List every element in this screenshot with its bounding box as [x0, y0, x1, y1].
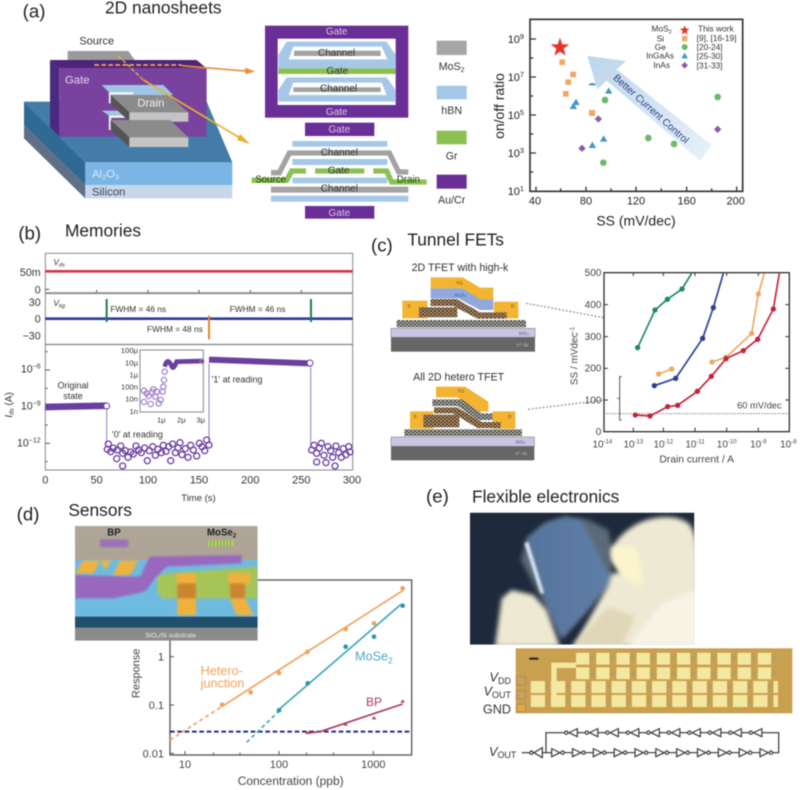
diagram: All 2D hetero TFET: All 2D hetero TFET	[413, 372, 505, 384]
chart: drain current vs time: '0' at reading	[112, 429, 163, 439]
y tick labels: 10	[508, 186, 520, 198]
diagram: 2D TFET with high-k: TG	[456, 281, 463, 287]
chart: SS vs drain current: -13	[635, 439, 644, 445]
y tick labels	[508, 32, 524, 198]
chart: drain current vs time: Original	[58, 381, 88, 391]
heading: Tunnel FETs: Tunnel FETs	[407, 229, 504, 249]
chart: response vs concentration: 1	[158, 652, 164, 664]
chart: SS vs drain current: 100	[585, 395, 602, 406]
inset chart: fast switching: 10n	[125, 395, 138, 404]
panel: (a) 2D nanosheets device	[23, 0, 467, 219]
y tick labels: 10	[508, 110, 520, 122]
legend: materials: 2	[461, 67, 465, 74]
diagram: 2D TFET with high-k: SiO₂	[519, 331, 529, 337]
inset chart: fast switching	[121, 346, 205, 425]
diagram: planar cross-section: Channel	[321, 147, 358, 158]
chart: drain current vs time: −9	[33, 400, 41, 407]
inset chart: fast switching: 1μ	[129, 370, 138, 379]
legend: MoS	[652, 24, 669, 34]
x axis labels: 50	[91, 474, 103, 486]
chart: SS vs drain current	[569, 268, 797, 466]
diagram: All 2D hetero TFET	[391, 372, 534, 460]
diagram: 2D TFET with high-k: D	[511, 304, 515, 310]
legend: materials	[437, 41, 467, 206]
chart: drain current vs time: '1' at reading	[212, 375, 263, 385]
inset chart: fast switching: 10μ	[125, 358, 138, 367]
chart: SS vs drain current: 400	[585, 300, 602, 311]
arrow: better current control: Better Current Control	[611, 73, 691, 146]
chart: SS vs drain current: 10	[592, 439, 604, 450]
icon: 3D transistor stack: Silicon	[92, 186, 125, 198]
panel: (e) Flexible electronics	[426, 486, 792, 760]
photo: BP/MoSe2 heterojunction device: MoSe	[207, 527, 233, 538]
diagram: planar cross-section: Gate	[328, 165, 350, 176]
chart: response vs concentration: 0.01	[143, 748, 164, 760]
leader lines	[526, 303, 645, 409]
y tick labels: 10	[508, 148, 520, 160]
chart: drain current vs time: I	[4, 415, 15, 418]
x axis labels: 300	[343, 474, 361, 486]
y tick labels: 10	[508, 72, 520, 84]
chart: Vds: 50m	[20, 267, 41, 279]
diagram: 2D TFET with high-k: 2D TFET with high-k	[412, 262, 509, 274]
diagram: double gate cross-section	[265, 26, 408, 118]
legend: Si	[657, 34, 664, 44]
legend: [25-30]	[697, 51, 723, 61]
diagram: planar cross-section: Channel	[321, 184, 358, 195]
x tick labels: 200	[727, 195, 745, 207]
labels: VDD VOUT GND: OUT	[492, 690, 512, 700]
chart: response vs concentration: 100	[270, 759, 288, 771]
arrow: to bottom cross-section	[118, 56, 250, 144]
chart: drain current vs time	[4, 345, 353, 470]
legend: materials: Au/Cr	[438, 194, 466, 206]
legend: [31-33]	[697, 60, 723, 70]
chart: SS vs drain current: -14	[604, 439, 613, 445]
panel: (c) Tunnel FETs	[371, 229, 797, 466]
diagram: 2D TFET with high-k: n⁺-Si	[517, 343, 528, 349]
chart: Vbg: bg	[59, 304, 66, 310]
diagram: double gate cross-section: Channel	[318, 48, 355, 59]
diagram: All 2D hetero TFET: n⁺-Si	[515, 451, 527, 457]
labels: VDD VOUT GND: V	[490, 670, 500, 684]
x axis title: Time: Time (s)	[181, 493, 216, 504]
chart: SS vs drain current: -8	[791, 439, 797, 445]
x tick labels: 80	[580, 195, 592, 207]
chart: Vbg: FWHM = 46 ns	[110, 304, 166, 314]
circuit: ring oscillator: OUT	[497, 750, 517, 760]
arrow: better current control	[587, 56, 712, 161]
chart: SS vs drain current: 10	[750, 439, 761, 450]
chart: drain current vs time: −12	[29, 438, 41, 445]
chart: drain current vs time: ds	[9, 408, 16, 415]
chart: response vs concentration: 1000	[361, 759, 386, 771]
chart: Vbg: 0	[35, 314, 41, 326]
chart: drain current vs time: 10	[17, 438, 29, 450]
photo: BP/MoSe2 heterojunction device: 2	[233, 532, 237, 539]
icon: 3D transistor stack: Source	[79, 36, 114, 48]
chart: response vs concentration: 0.1	[149, 700, 164, 712]
chart: SS vs drain current: 10	[623, 439, 635, 450]
icon: 3D transistor stack	[24, 36, 232, 198]
icon: 3D transistor stack: O	[106, 168, 115, 180]
y tick labels: 9	[520, 32, 524, 41]
chart: SS vs drain current: Drain current / A	[659, 455, 734, 466]
icon: 3D transistor stack: 3	[115, 173, 119, 182]
chart: SS vs drain current: 0	[596, 427, 602, 438]
icon: 3D transistor stack: Al	[92, 168, 102, 180]
chart: Vbg: FWHM = 48 ns	[147, 324, 203, 334]
legend: materials: Gr	[446, 150, 458, 162]
diagram: double gate cross-section: Gate	[326, 107, 348, 118]
x axis labels: 250	[292, 474, 310, 486]
chart: response vs concentration: Hetero-	[201, 664, 243, 678]
photo: BP/MoSe2 heterojunction device	[75, 526, 258, 641]
legend: InAs	[653, 60, 670, 70]
chart: drain current vs time: 10	[21, 400, 33, 412]
chart: SS vs drain current: 10	[653, 439, 665, 450]
chart: Vbg: V	[53, 298, 59, 308]
inset chart: fast switching: 1n	[129, 407, 138, 416]
legend: 2	[669, 29, 672, 35]
chart: SS vs drain current: 300	[585, 332, 602, 343]
chart: SS vs drain current: -1	[569, 326, 576, 332]
photo: BP/MoSe2 heterojunction device: BP	[107, 527, 121, 538]
icon: 3D transistor stack: Drain	[137, 98, 164, 110]
panel label d: (d)	[17, 504, 39, 525]
chart: Vds	[20, 253, 353, 296]
axes	[530, 19, 743, 191]
diagram: double gate cross-section: Gate	[327, 66, 349, 77]
panel: (b) Memories	[4, 221, 361, 486]
legend: Ge	[655, 42, 666, 52]
inset chart: fast switching: 1μ	[157, 416, 166, 425]
x tick labels: 40	[529, 195, 541, 207]
chart: response vs concentration: Response	[130, 649, 142, 698]
panel label e: (e)	[426, 486, 449, 507]
inset chart: fast switching: 2μ	[177, 416, 186, 425]
legend: [9], [16-19]	[697, 33, 736, 43]
chart: SS vs drain current: -9	[761, 439, 767, 445]
x axis labels: 200	[241, 474, 259, 486]
y tick labels: 5	[520, 108, 524, 117]
legend: [20-24]	[697, 42, 723, 52]
chart: drain current vs time: (A)	[4, 392, 15, 408]
chart: on/off ratio vs SS	[491, 19, 745, 229]
x axis labels: 0	[42, 474, 48, 486]
chart: SS vs drain current: -11	[696, 439, 705, 445]
icon: 3D transistor stack: 2	[102, 173, 106, 182]
chart: Vds: V	[53, 257, 59, 267]
diagram: 2D TFET with high-k: Al₂O₃	[454, 293, 466, 299]
chart: response vs concentration	[130, 580, 412, 788]
diagram: 2D TFET with high-k	[391, 262, 535, 352]
photo: ring oscillator chip	[516, 648, 792, 713]
x axis title: SS (mV/dec)	[596, 213, 676, 229]
inset chart: fast switching: 3μ	[196, 416, 205, 425]
x tick labels	[529, 195, 745, 207]
labels: VDD VOUT GND: DD	[498, 676, 512, 686]
chart: SS vs drain current: 10	[780, 439, 791, 450]
chart: SS vs drain current: SS / mVdec	[569, 332, 580, 385]
chart: SS vs drain current: 60 mV/dec	[737, 401, 782, 411]
y axis title: on/off ratio	[491, 73, 507, 139]
chart: drain current vs time: −6	[33, 364, 41, 371]
chart: Vbg	[23, 294, 353, 344]
diagram: All 2D hetero TFET: S	[413, 414, 417, 420]
x tick labels: 160	[678, 195, 696, 207]
labels: VDD VOUT GND: GND	[483, 702, 511, 716]
x tick labels: 120	[627, 195, 645, 207]
y tick labels: 7	[520, 70, 524, 79]
chart: SS vs drain current: 500	[585, 268, 602, 279]
heading: Memories: Memories	[65, 221, 141, 241]
chart: response vs concentration: 2	[388, 655, 393, 665]
diagram: planar cross-section: Drain	[397, 175, 420, 186]
diagram: double gate cross-section: Gate	[326, 26, 348, 37]
chart: SS vs drain current: 200	[585, 364, 602, 375]
y tick labels: 1	[520, 184, 524, 193]
inset chart: fast switching: 100n	[121, 382, 138, 391]
circuit: ring oscillator: V	[489, 745, 499, 759]
labels: VDD VOUT GND	[483, 670, 512, 716]
labels: VDD VOUT GND: V	[484, 684, 494, 698]
inset chart: fast switching: 100μ	[121, 346, 138, 355]
chart: Vds: ds	[59, 263, 65, 269]
diagram: planar cross-section: Gate	[329, 208, 351, 219]
circuit: ring oscillator	[489, 727, 779, 760]
diagram: All 2D hetero TFET: TG	[457, 389, 464, 395]
y tick labels: 10	[508, 34, 520, 46]
panel: (d) Sensors	[17, 500, 412, 788]
chart: drain current vs time: state	[63, 391, 83, 401]
x axis labels: 100	[139, 474, 157, 486]
x axis labels: 150	[190, 474, 208, 486]
chart: response vs concentration: Concentration (ppb)	[238, 774, 344, 788]
y tick labels: 3	[520, 146, 524, 155]
diagram: planar cross-section	[252, 123, 427, 219]
heading: Sensors: Sensors	[68, 500, 132, 520]
diagram: All 2D hetero TFET: D	[508, 414, 512, 420]
legend: This work	[698, 24, 734, 34]
chart: response vs concentration: MoSe	[355, 650, 388, 664]
legend: InGaAs	[646, 51, 674, 61]
panel label c: (c)	[371, 234, 393, 255]
chart: SS vs drain current: -12	[665, 439, 674, 445]
diagram: planar cross-section: Source	[255, 175, 286, 186]
chart: SS vs drain current: 10	[685, 439, 696, 450]
chart: Vbg: 30	[29, 297, 41, 309]
diagram: double gate cross-section: Channel	[320, 84, 357, 95]
chart: response vs concentration: junction	[200, 676, 244, 690]
chart: Vds: 0	[35, 284, 41, 296]
chart: response vs concentration: BP	[366, 695, 382, 709]
legend: materials: hBN	[441, 105, 462, 117]
chart: drain current vs time: 10	[21, 364, 33, 376]
heading: Flexible electronics: Flexible electronics	[472, 487, 620, 507]
photo: BP/MoSe2 heterojunction device: SiO₂/Si substrate	[145, 633, 196, 640]
diagram: 2D TFET with high-k: S	[407, 304, 411, 310]
chart: SS vs drain current: 10	[717, 439, 728, 450]
data points	[551, 38, 721, 166]
panel label b: (b)	[18, 222, 41, 243]
icon: 3D transistor stack: Gate	[65, 74, 90, 86]
panel label a: (a)	[23, 0, 45, 21]
chart: Vbg: −30	[23, 330, 41, 342]
x axis labels	[42, 474, 361, 486]
arrow: to top cross-section	[94, 65, 255, 74]
chart: Vbg: FWHM = 46 ns	[230, 304, 285, 314]
chart: response vs concentration: 10	[179, 759, 191, 771]
legend	[646, 24, 736, 70]
diagram: All 2D hetero TFET: SiO₂	[515, 440, 526, 446]
photo: flexible wafer held by gloves	[470, 513, 698, 647]
diagram: planar cross-section: Gate	[329, 125, 351, 136]
legend: materials: MoS	[439, 61, 461, 73]
chart: SS vs drain current: -10	[728, 439, 737, 445]
